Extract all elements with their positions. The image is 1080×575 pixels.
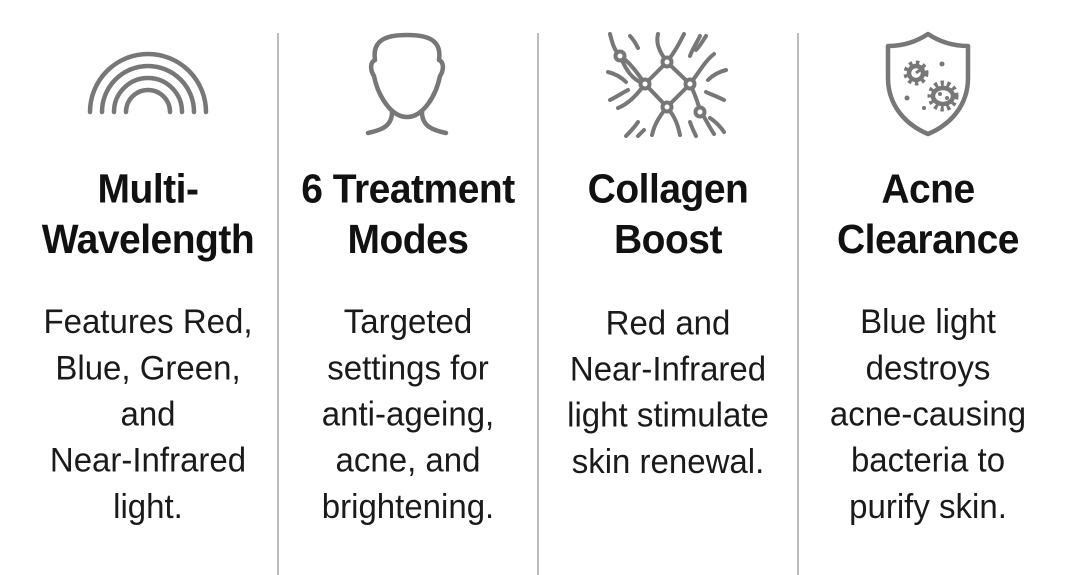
text block: Blue, Green, xyxy=(55,348,241,387)
heading: Acne xyxy=(881,167,975,212)
text block: Features Red, xyxy=(43,302,253,340)
heading xyxy=(301,167,515,262)
icon: rainbow arcs xyxy=(88,52,208,114)
heading: Multi- xyxy=(98,167,198,212)
text block: Red and xyxy=(606,303,730,342)
text block xyxy=(567,303,769,480)
text block: Near-Infrared xyxy=(50,440,246,479)
heading xyxy=(837,167,1019,262)
text block: light. xyxy=(113,486,183,525)
panel: treatment modes xyxy=(301,32,515,525)
text block: acne, and xyxy=(336,440,480,479)
text block: acne-causing xyxy=(830,394,1026,433)
text block: skin renewal. xyxy=(572,441,764,480)
text block: anti-ageing, xyxy=(322,394,494,433)
text block: settings for xyxy=(327,348,489,387)
panel: collagen boost xyxy=(567,32,769,480)
heading: 6 Treatment xyxy=(301,167,515,212)
text block xyxy=(830,302,1026,525)
text block xyxy=(43,302,253,525)
heading xyxy=(588,167,748,262)
text block: Blue light xyxy=(860,302,996,340)
text block: destroys xyxy=(866,348,990,387)
heading: Modes xyxy=(347,217,468,262)
panel: acne clearance xyxy=(830,32,1026,525)
text block: light stimulate xyxy=(567,395,769,434)
text block: Targeted xyxy=(344,302,472,340)
heading: Clearance xyxy=(837,217,1019,262)
text block: and xyxy=(120,394,176,433)
heading: Boost xyxy=(614,217,722,262)
heading xyxy=(42,167,254,262)
icon: collagen network xyxy=(606,32,728,138)
panel: multi-wavelength xyxy=(42,52,254,525)
heading: Wavelength xyxy=(42,217,254,262)
heading: Collagen xyxy=(588,167,748,212)
text block xyxy=(322,302,494,525)
icon: face xyxy=(366,32,448,136)
text block: brightening. xyxy=(322,486,494,525)
text block: purify skin. xyxy=(849,486,1007,525)
text block: Near-Infrared xyxy=(570,349,766,388)
text block: bacteria to xyxy=(851,440,1005,479)
icon: shield with bacteria xyxy=(886,32,970,136)
